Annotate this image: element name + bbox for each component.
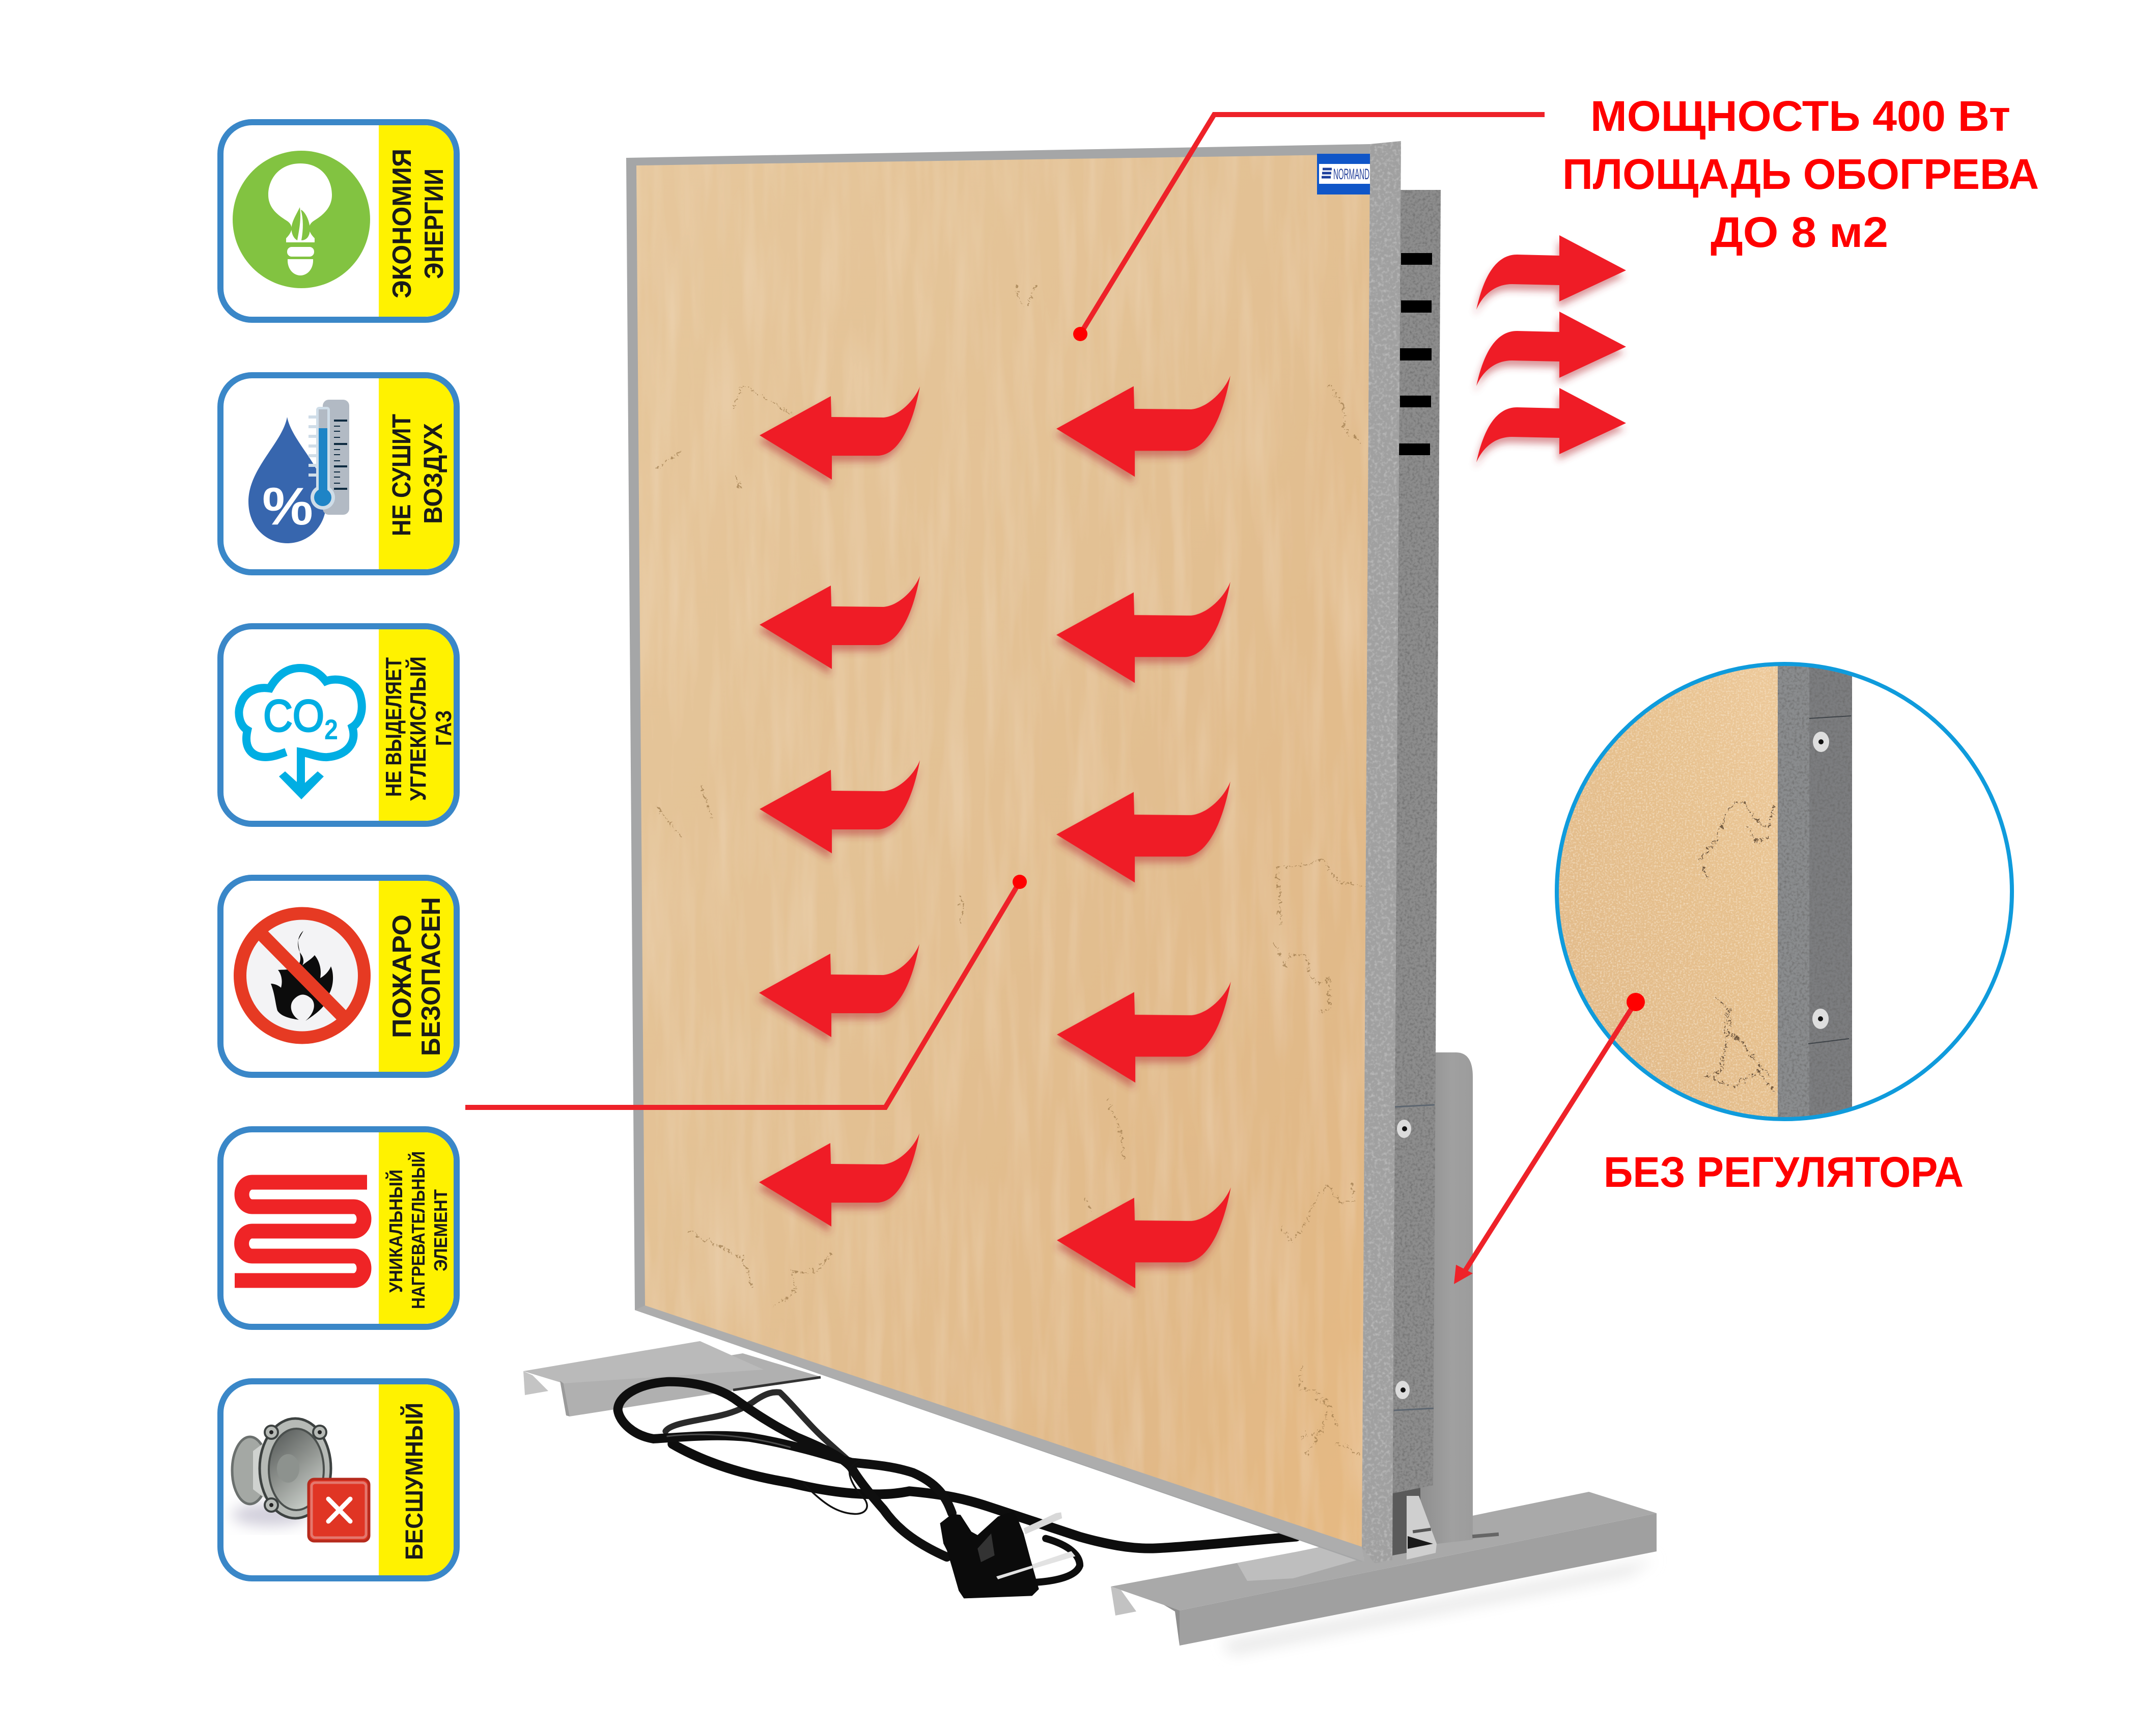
label: no CO2: НЕ ВЫДЕЛЯЕТ: [381, 657, 406, 797]
label: silent: БЕСШУМНЫЙ: [400, 1403, 428, 1560]
label: fire safe: БЕЗОПАСЕН: [416, 897, 446, 1056]
stone veins: [653, 283, 1363, 1452]
icon: CO2 cloud: CO: [263, 690, 324, 741]
arrow 7: [1056, 582, 1230, 683]
card: energy saving: [220, 122, 457, 320]
rivets in detail: [1812, 732, 1829, 1029]
power plug: [940, 1512, 1075, 1598]
arrow 3: [760, 760, 920, 853]
arrow 8: [1056, 782, 1230, 882]
card: unique heating element: [220, 1129, 457, 1327]
convection arrow top: [1476, 235, 1626, 310]
card: does not dry air: [220, 375, 457, 572]
heading: power and area: ДО 8 м2: [1711, 208, 1888, 256]
arrow 1: [760, 386, 920, 480]
arrow 6: [1056, 376, 1230, 477]
label: no CO2: ГАЗ: [431, 710, 456, 746]
label: no CO2: УГЛЕКИСЛЫЙ: [405, 656, 431, 801]
label: no regulator: БЕЗ РЕГУЛЯТОРА: [1604, 1148, 1964, 1196]
label: unique heating element: УНИКАЛЬНЫЙ: [385, 1170, 406, 1293]
card: fire safe: [220, 878, 457, 1075]
icon: no fire sign: [240, 913, 365, 1038]
brand sticker: [1317, 154, 1370, 194]
label: energy saving: ЭКОНОМИЯ: [387, 149, 417, 298]
power cord: [618, 1382, 1296, 1582]
label: fire safe: ПОЖАРО: [387, 914, 417, 1038]
convection arrow middle: [1476, 312, 1626, 386]
heading: power and area: МОЩНОСТЬ 400 Вт: [1590, 92, 2010, 140]
label: fire safe: [387, 897, 446, 1056]
label: energy saving: [387, 149, 449, 298]
heater product: [523, 141, 1657, 1646]
arrow 9: [1057, 982, 1231, 1082]
label: energy saving: ЭНЕРГИИ: [419, 169, 449, 279]
callout line: ceramic: [465, 875, 1027, 1107]
heat arrows on ceramic, right column: [1056, 376, 1231, 1288]
pointer arrow to stand: [1454, 993, 1645, 1284]
icon: green bulb: [233, 151, 370, 288]
icon: drop and thermometer: [248, 400, 349, 543]
arrow 5: [759, 1133, 919, 1227]
icon: drop and thermometer: %: [262, 477, 313, 536]
label: does not dry air: [387, 414, 447, 536]
icon: muted speaker: [232, 1418, 369, 1541]
bracket at panel base: [1392, 1488, 1499, 1560]
heading: power and area: [1562, 92, 2039, 256]
convection arrow bottom: [1476, 388, 1626, 462]
label: no CO2: [381, 656, 456, 801]
label: does not dry air: НЕ СУШИТ: [387, 414, 416, 536]
convection arrows at rear: [1476, 235, 1626, 462]
magnified detail circle: [1553, 662, 2012, 1125]
icon: serpentine element: [235, 1182, 367, 1281]
card: no CO2: [220, 626, 457, 824]
heading: power and area: ПЛОЩАДЬ ОБОГРЕВА: [1562, 150, 2039, 198]
label: unique heating element: [385, 1151, 451, 1309]
heat arrows on ceramic, left column: [759, 386, 920, 1227]
label: does not dry air: ВОЗДУХ: [418, 423, 447, 524]
floor shadow: [1222, 1559, 1655, 1655]
arrow 4: [759, 944, 919, 1037]
label: unique heating element: НАГРЕВАТЕЛЬНЫЙ: [407, 1151, 429, 1309]
heater product: NORMAND: [1333, 166, 1369, 183]
callout line: power: [1073, 115, 1545, 341]
rivet: [1395, 1120, 1411, 1399]
front foot: [1111, 1492, 1657, 1646]
vertical stand: [1420, 1052, 1473, 1546]
ceramic front: [636, 154, 1370, 1547]
icon: CO2 cloud: [239, 668, 362, 799]
label: unique heating element: ЭЛЕМЕНТ: [430, 1189, 451, 1271]
arrow 2: [760, 576, 920, 669]
metal frame: [626, 141, 1401, 1563]
rear panel with vents: [1392, 190, 1441, 1493]
back foot: [523, 1341, 821, 1416]
card: silent: [220, 1381, 457, 1578]
icon: CO2 cloud: 2: [324, 713, 338, 745]
arrow 10: [1057, 1187, 1231, 1288]
